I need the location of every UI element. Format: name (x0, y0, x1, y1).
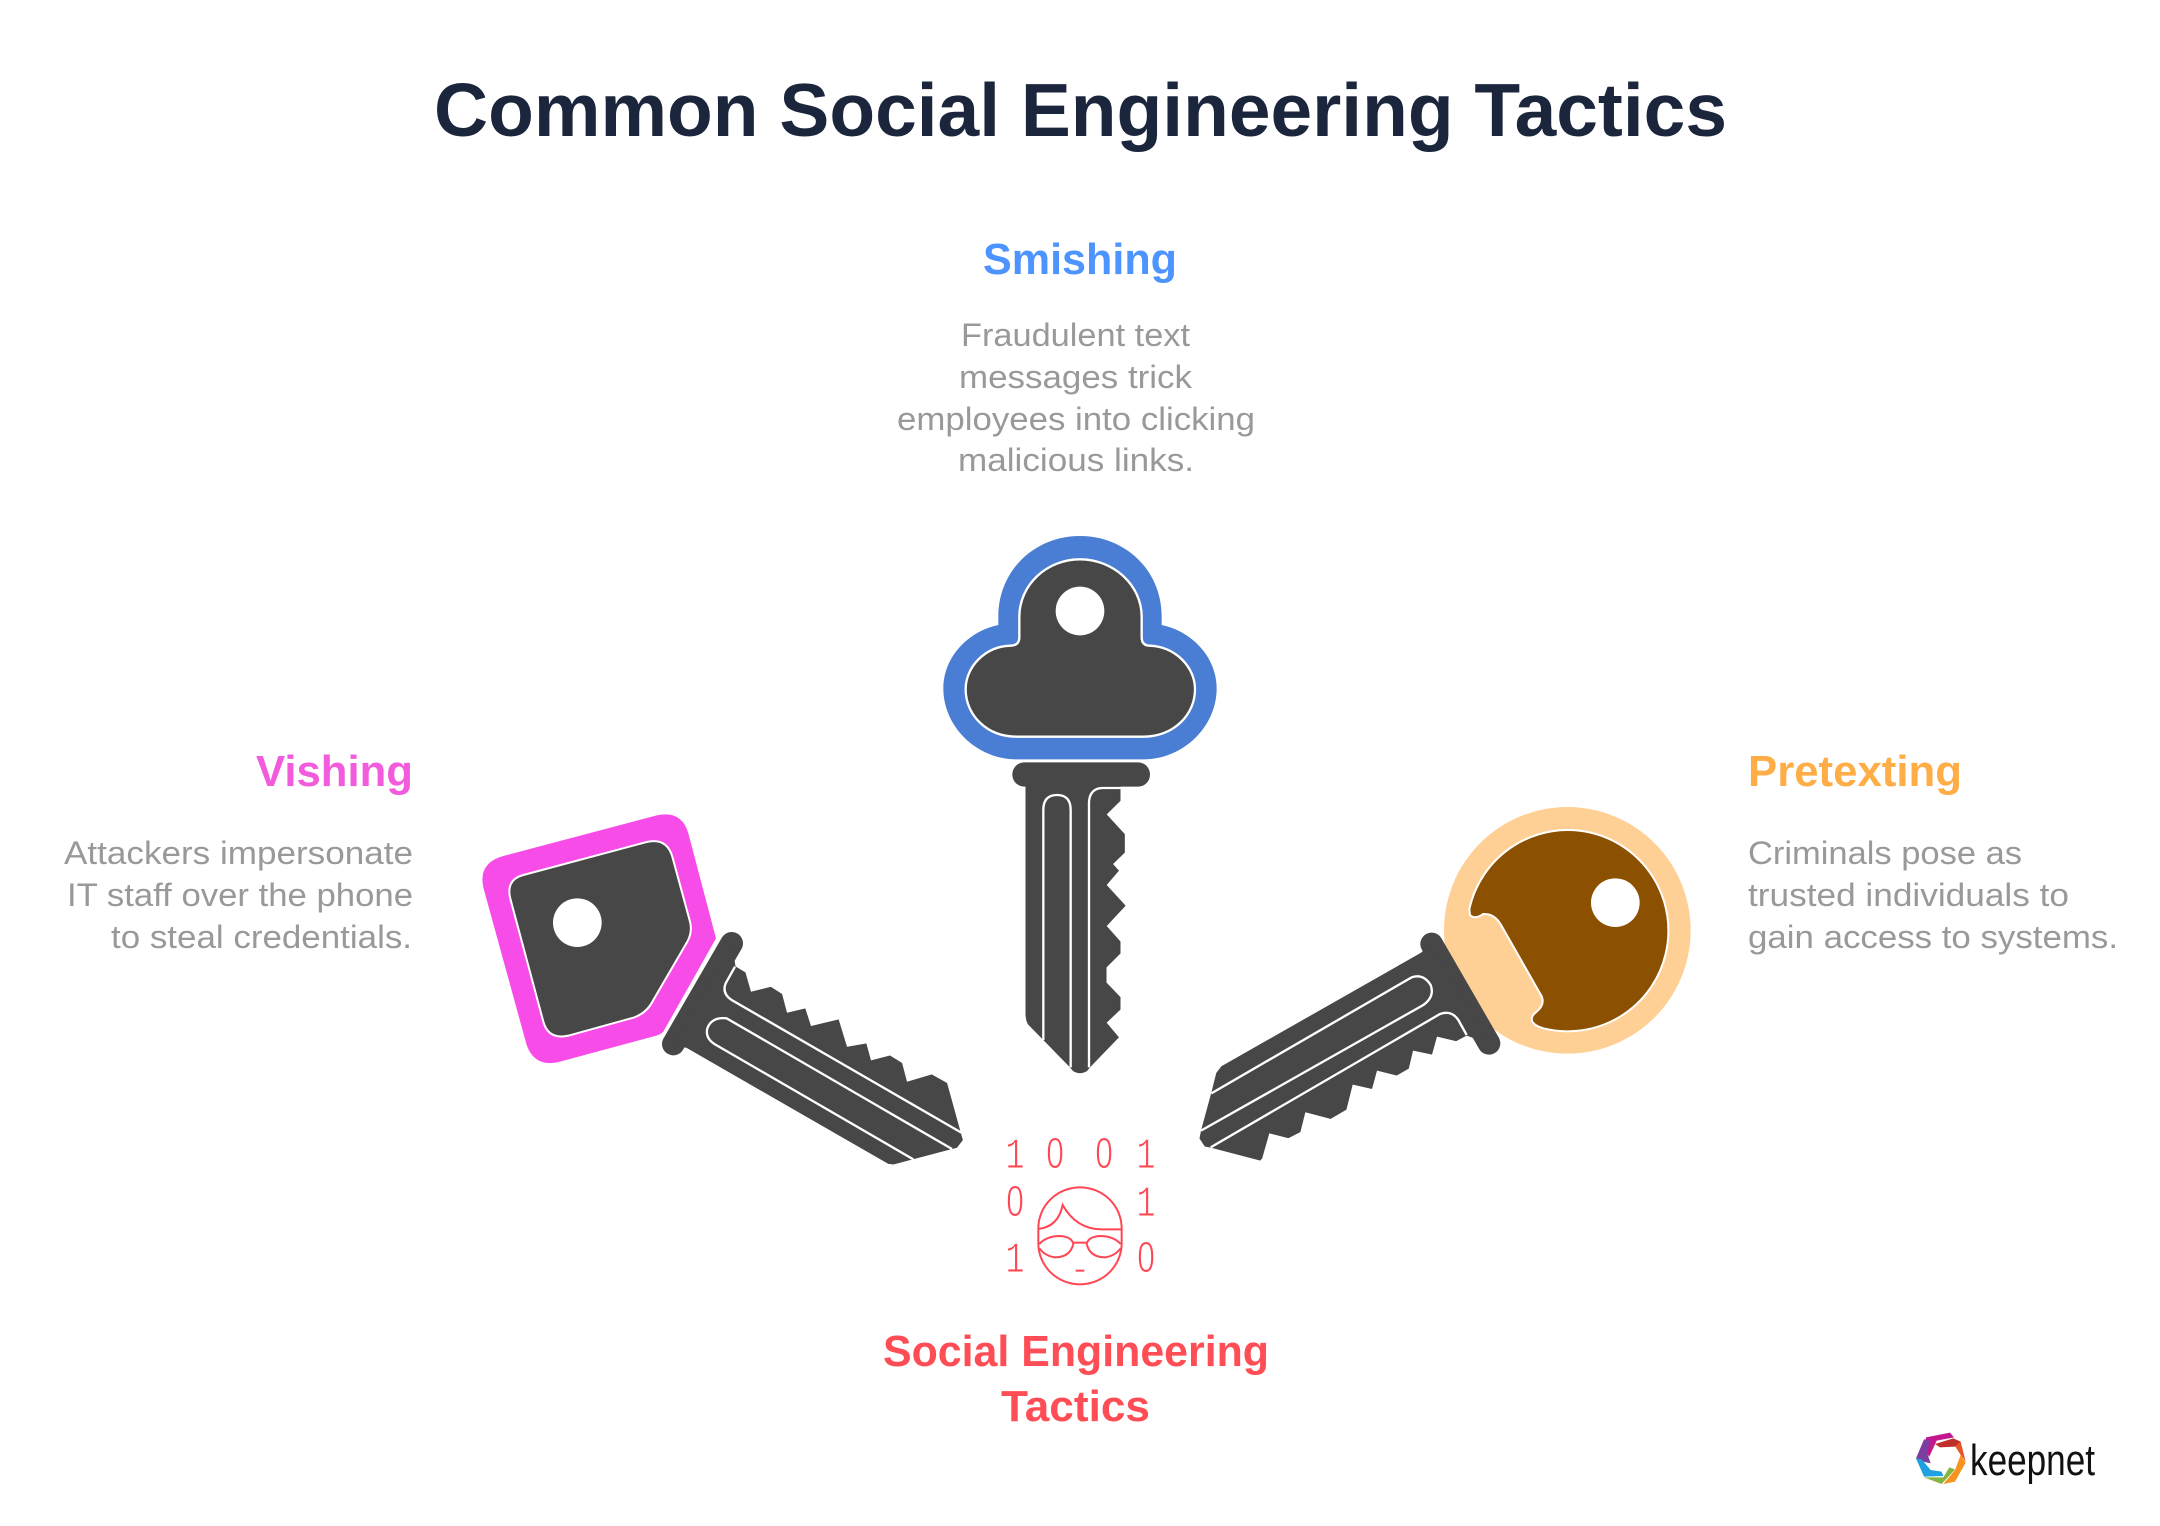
text block: smishing description: employees into clicking (897, 401, 1255, 437)
text block: pretexting description: Criminals pose as (1748, 835, 2022, 871)
text block: smishing description: malicious links. (958, 442, 1194, 478)
title: Common Social Engineering Tactics (434, 68, 1727, 152)
text block: vishing description: to steal credentials. (111, 919, 412, 955)
panel: pretexting text (1748, 747, 2118, 955)
face (1038, 1187, 1122, 1284)
icon: hacker face with binary digits (1005, 1129, 1156, 1286)
text block: pretexting description: gain access to systems. (1748, 919, 2118, 955)
logo: keepnet (1916, 1433, 2095, 1485)
text block: vishing description (64, 835, 413, 955)
icon: blue key (smishing) (943, 536, 1217, 1073)
panel: vishing text (64, 747, 413, 955)
text block: smishing description (897, 317, 1255, 478)
logo wordmark: keepnet (1970, 1436, 2095, 1485)
panel: social engineering tactics label (883, 1327, 1269, 1431)
binary digits: 1 (1136, 1131, 1156, 1182)
text block: pretexting description: trusted individuals to (1748, 877, 2069, 913)
heading: smishing: Smishing (983, 235, 1177, 284)
icon: orange key (pretexting) (1200, 807, 1691, 1160)
text block: vishing description: IT staff over the phone (67, 877, 413, 913)
binary digits: 1 (1005, 1131, 1025, 1182)
panel: social engineering tactics label: Tactics (1001, 1382, 1150, 1431)
text block: pretexting description (1748, 835, 2118, 955)
heading: vishing: Vishing (256, 747, 413, 796)
binary digits: 0 (1095, 1129, 1113, 1178)
text block: smishing description: Fraudulent text (961, 317, 1190, 353)
icon: pink key (vishing) (482, 814, 962, 1164)
binary digits: 1 (1005, 1235, 1025, 1286)
text block: smishing description: messages trick (959, 359, 1193, 395)
binary digits: 0 (1046, 1129, 1064, 1178)
text block: vishing description: Attackers impersonate (64, 835, 413, 871)
binary digits: 0 (1006, 1177, 1024, 1226)
logo mark (1916, 1433, 1966, 1484)
binary digits: 0 (1137, 1233, 1155, 1282)
binary digits (1005, 1129, 1156, 1286)
panel: social engineering tactics label: Social Engineering (883, 1327, 1269, 1376)
heading: pretexting: Pretexting (1748, 747, 1962, 796)
panel: smishing text (897, 235, 1255, 478)
binary digits: 1 (1136, 1179, 1156, 1230)
